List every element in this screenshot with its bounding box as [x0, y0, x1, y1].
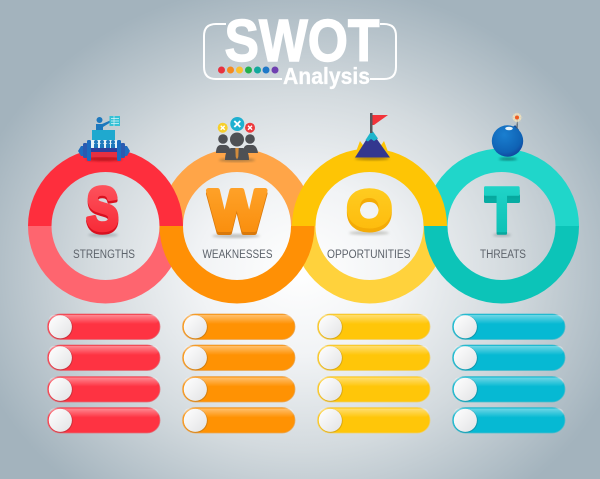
strengths sliders	[48, 314, 160, 433]
label: weaknesses: WEAKNESSES	[202, 249, 273, 261]
colour dots	[218, 66, 278, 74]
ring lower: opportunities	[292, 226, 447, 303]
label: threats: THREATS	[480, 249, 526, 261]
letter O: O	[347, 179, 392, 237]
warning mark: red	[245, 123, 255, 133]
label: opportunities: OPPORTUNITIES	[327, 249, 411, 261]
letter W: W	[208, 182, 266, 245]
slider 3	[452, 376, 565, 402]
icon: dumbbell with presenter	[78, 116, 130, 161]
slider 2	[318, 345, 430, 370]
slider 4	[48, 408, 160, 433]
ring upper: strengths	[28, 149, 183, 226]
slider 3	[48, 376, 160, 402]
letter O: O	[347, 183, 392, 241]
warning mark: teal	[230, 117, 244, 131]
ring lower: weaknesses	[160, 226, 314, 304]
slider 3	[318, 376, 430, 402]
slider 1	[182, 314, 295, 340]
slider 4	[182, 408, 295, 433]
ring lower: strengths	[28, 226, 183, 303]
slider 4	[318, 408, 430, 433]
weaknesses sliders	[182, 314, 295, 433]
slider 1	[318, 314, 430, 340]
slider 1	[48, 314, 160, 340]
opportunities sliders	[318, 314, 430, 433]
icon: mountain with flag	[354, 113, 390, 160]
icon: team with warning marks	[216, 117, 258, 162]
letter S: S	[86, 178, 119, 245]
ring lower: threats	[424, 226, 579, 304]
letter T: T	[484, 174, 519, 245]
letter T: T	[484, 177, 519, 247]
ring upper: weaknesses	[160, 148, 314, 226]
slider 4	[452, 408, 565, 433]
letter S: S	[86, 175, 119, 243]
slider 2	[182, 345, 295, 370]
slider 2	[48, 345, 160, 370]
slider 1	[452, 314, 565, 340]
title word Analysis: Analysis	[283, 63, 370, 89]
ring upper: opportunities	[292, 149, 447, 226]
title word SWOT: SWOT	[224, 8, 380, 74]
label: strengths: STRENGTHS	[73, 249, 135, 261]
title: SWOT Analysis	[204, 8, 396, 89]
warning mark: yellow	[218, 123, 228, 133]
slider 2	[452, 345, 565, 370]
letter W: W	[208, 179, 266, 242]
title frame	[204, 24, 396, 79]
ring upper: threats	[424, 148, 579, 226]
threats sliders	[452, 314, 565, 433]
icon: bomb	[492, 112, 523, 160]
slider 3	[182, 376, 295, 402]
